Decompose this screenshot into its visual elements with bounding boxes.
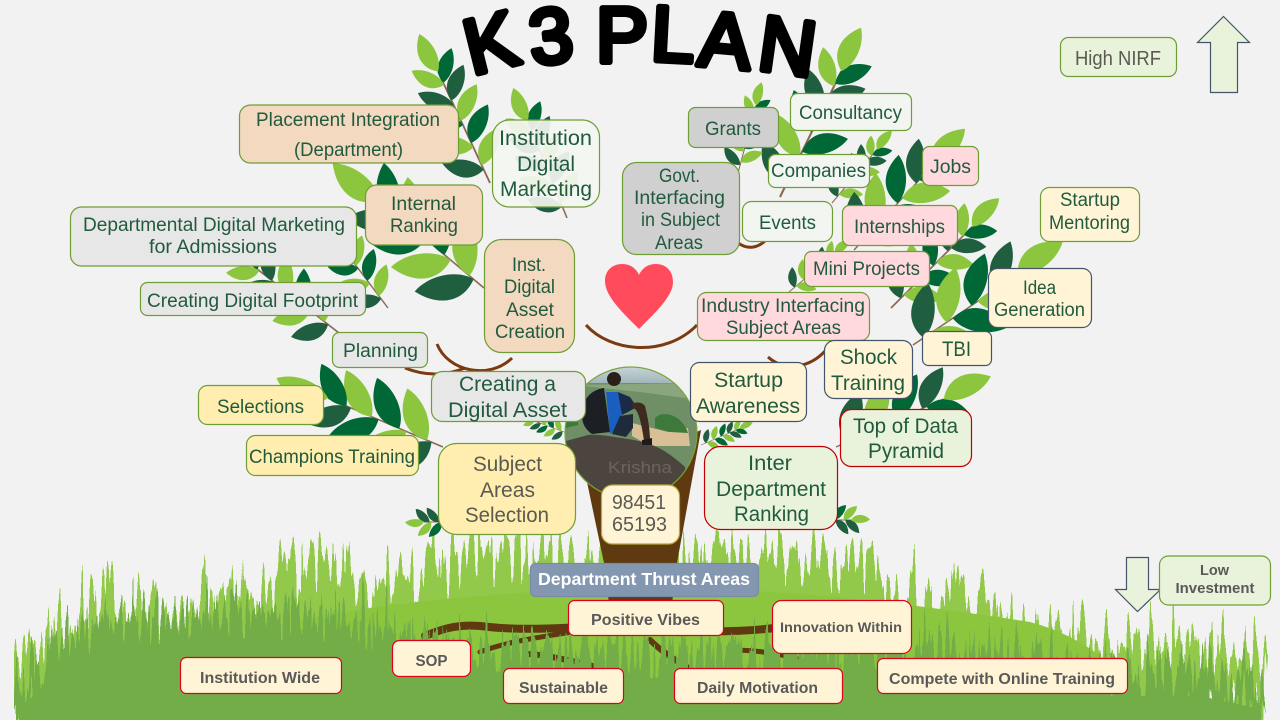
box: Govt. Interfacing in Subject Areas: Areas bbox=[655, 233, 703, 254]
box: phone number: 98451 bbox=[612, 492, 666, 514]
box: Top of Data Pyramid bbox=[840, 410, 972, 466]
box: Top of Data Pyramid: Top of Data bbox=[853, 415, 958, 438]
box: Compete with Online Training: Compete with Online Training bbox=[889, 671, 1115, 688]
box: Creating a Digital Asset: Creating a bbox=[459, 373, 556, 396]
grass and hill bbox=[14, 548, 1268, 720]
photo circle: Krishna bbox=[608, 458, 673, 477]
box: Mini Projects: Mini Projects bbox=[813, 259, 920, 280]
box: Champions Training: Champions Training bbox=[249, 447, 415, 468]
box: Shock Training bbox=[824, 340, 912, 398]
box: phone number: 65193 bbox=[612, 514, 667, 536]
box: Internal Ranking: Ranking bbox=[390, 216, 458, 237]
box: Jobs: Jobs bbox=[930, 157, 971, 178]
box: SOP: SOP bbox=[416, 653, 448, 670]
box: TBI bbox=[922, 332, 992, 366]
box: Department Thrust Areas: Department Thrust Areas bbox=[538, 569, 750, 589]
box: Compete with Online Training bbox=[878, 658, 1128, 694]
box: Positive Vibes: Positive Vibes bbox=[591, 612, 700, 629]
box: Jobs bbox=[922, 146, 978, 186]
box: Startup Mentoring bbox=[1040, 188, 1140, 242]
box: Shock Training: Shock bbox=[840, 346, 897, 369]
box: Consultancy bbox=[790, 94, 912, 130]
box: Govt. Interfacing in Subject Areas: Govt. bbox=[659, 166, 700, 187]
box: Placement Integration: Placement Integration bbox=[256, 110, 440, 131]
box: Inter Department Ranking bbox=[704, 446, 838, 530]
box: Grants: Grants bbox=[705, 119, 761, 140]
box: Placement Integration: (Department) bbox=[294, 140, 403, 161]
box: Daily Motivation: Daily Motivation bbox=[697, 680, 818, 697]
box: High NIRF: High NIRF bbox=[1075, 48, 1161, 70]
box: Startup Awareness: Startup bbox=[714, 369, 783, 392]
box: Planning bbox=[332, 332, 428, 368]
box: Champions Training bbox=[246, 436, 418, 476]
box: Govt. Interfacing in Subject Areas: in Subject bbox=[641, 210, 721, 231]
box: Institution Digital Marketing: Institution bbox=[499, 127, 592, 150]
box: Subject Areas Selection: Selection bbox=[465, 504, 549, 527]
box: Govt. Interfacing in Subject Areas bbox=[622, 162, 740, 254]
box: Inter Department Ranking: Inter bbox=[748, 452, 792, 475]
box: SOP bbox=[392, 640, 470, 676]
box: Consultancy: Consultancy bbox=[799, 103, 902, 124]
box: Institution Digital Marketing: Marketing bbox=[500, 178, 592, 201]
box: Creating Digital Footprint bbox=[140, 282, 366, 316]
box: Department Thrust Areas bbox=[530, 564, 758, 596]
box: Events bbox=[742, 202, 832, 242]
box: Institution Wide bbox=[180, 658, 342, 694]
box: Positive Vibes bbox=[568, 600, 724, 636]
box: Low Investment: Low bbox=[1200, 562, 1229, 579]
tree trunk bbox=[587, 430, 701, 604]
box: Planning: Planning bbox=[343, 341, 418, 362]
tree roots bbox=[425, 624, 815, 680]
box: Inst. Digital Asset Creation bbox=[484, 240, 574, 352]
box: Internal Ranking bbox=[366, 185, 482, 245]
box: Low Investment: Investment bbox=[1176, 580, 1254, 597]
grass base bbox=[22, 638, 1256, 720]
box: Top of Data Pyramid: Pyramid bbox=[868, 440, 944, 463]
box: Inst. Digital Asset Creation: Creation bbox=[495, 322, 565, 343]
box: Industry Interfacing Subject Areas: Subject Areas bbox=[726, 318, 841, 339]
box: Selections: Selections bbox=[217, 397, 304, 418]
box: Idea Generation bbox=[988, 268, 1092, 328]
box: Inst. Digital Asset Creation: Asset bbox=[506, 300, 555, 321]
curved brown branches bbox=[405, 240, 826, 374]
box: Subject Areas Selection: Areas bbox=[480, 479, 535, 502]
box: Mini Projects bbox=[804, 252, 930, 286]
box: Internships: Internships bbox=[854, 217, 945, 238]
box: Creating a Digital Asset: Digital Asset bbox=[448, 399, 567, 422]
box: phone number bbox=[602, 485, 680, 544]
box: Low Investment bbox=[1160, 556, 1270, 605]
box: Startup Mentoring: Mentoring bbox=[1049, 213, 1130, 234]
box: Subject Areas Selection: Subject bbox=[473, 453, 542, 476]
hill bbox=[300, 588, 1110, 720]
box: Creating a Digital Asset bbox=[432, 372, 586, 422]
box: Departmental Digital Marketing bbox=[70, 207, 356, 266]
box: Institution Wide: Institution Wide bbox=[200, 670, 320, 687]
box: Institution Digital Marketing: Digital bbox=[517, 153, 575, 176]
box: Internal Ranking: Internal bbox=[391, 194, 456, 215]
box: Inst. Digital Asset Creation: Inst. bbox=[512, 255, 546, 276]
box: Inter Department Ranking: Ranking bbox=[734, 503, 809, 526]
tree branches with leaves bbox=[194, 8, 1090, 540]
box: Sustainable bbox=[504, 668, 624, 704]
box: Internships bbox=[842, 206, 958, 246]
box: Govt. Interfacing in Subject Areas: Interfacing bbox=[634, 188, 725, 209]
box: Startup Awareness: Awareness bbox=[696, 395, 800, 418]
box: Departmental Digital Marketing: Departmental Digital Marketing bbox=[83, 215, 345, 236]
box: Grants bbox=[688, 108, 778, 148]
box: Inter Department Ranking: Department bbox=[716, 478, 826, 501]
box: Industry Interfacing Subject Areas bbox=[698, 292, 870, 340]
box: TBI: TBI bbox=[942, 338, 971, 361]
arrow: down bbox=[1116, 558, 1160, 612]
box: Innovation Within bbox=[772, 600, 912, 654]
box: Placement Integration bbox=[240, 105, 458, 163]
box: Sustainable: Sustainable bbox=[519, 680, 608, 697]
box: Startup Mentoring: Startup bbox=[1060, 190, 1120, 211]
box: Idea Generation: Idea bbox=[1023, 278, 1056, 299]
box: Departmental Digital Marketing: for Admissions bbox=[149, 237, 277, 258]
box: Inst. Digital Asset Creation: Digital bbox=[504, 277, 555, 298]
box: Idea Generation: Generation bbox=[994, 300, 1085, 321]
box: Companies bbox=[768, 154, 870, 188]
box: Selections bbox=[198, 386, 324, 424]
box: Innovation Within: Innovation Within bbox=[780, 619, 902, 635]
box: Daily Motivation bbox=[674, 668, 842, 704]
box: Startup Awareness bbox=[690, 362, 806, 422]
box: High NIRF bbox=[1060, 38, 1176, 76]
arrow: up bbox=[1198, 16, 1250, 92]
box: Industry Interfacing Subject Areas: Industry Interfacing bbox=[701, 296, 865, 317]
box: Events: Events bbox=[759, 213, 816, 234]
icon: heart bbox=[605, 264, 673, 329]
photo circle bbox=[564, 366, 698, 492]
box: Institution Digital Marketing bbox=[492, 120, 600, 207]
box: Subject Areas Selection bbox=[438, 444, 576, 534]
box: Companies: Companies bbox=[771, 161, 866, 182]
box: Shock Training: Training bbox=[831, 372, 905, 395]
box: Creating Digital Footprint: Creating Digital Footprint bbox=[147, 291, 359, 312]
